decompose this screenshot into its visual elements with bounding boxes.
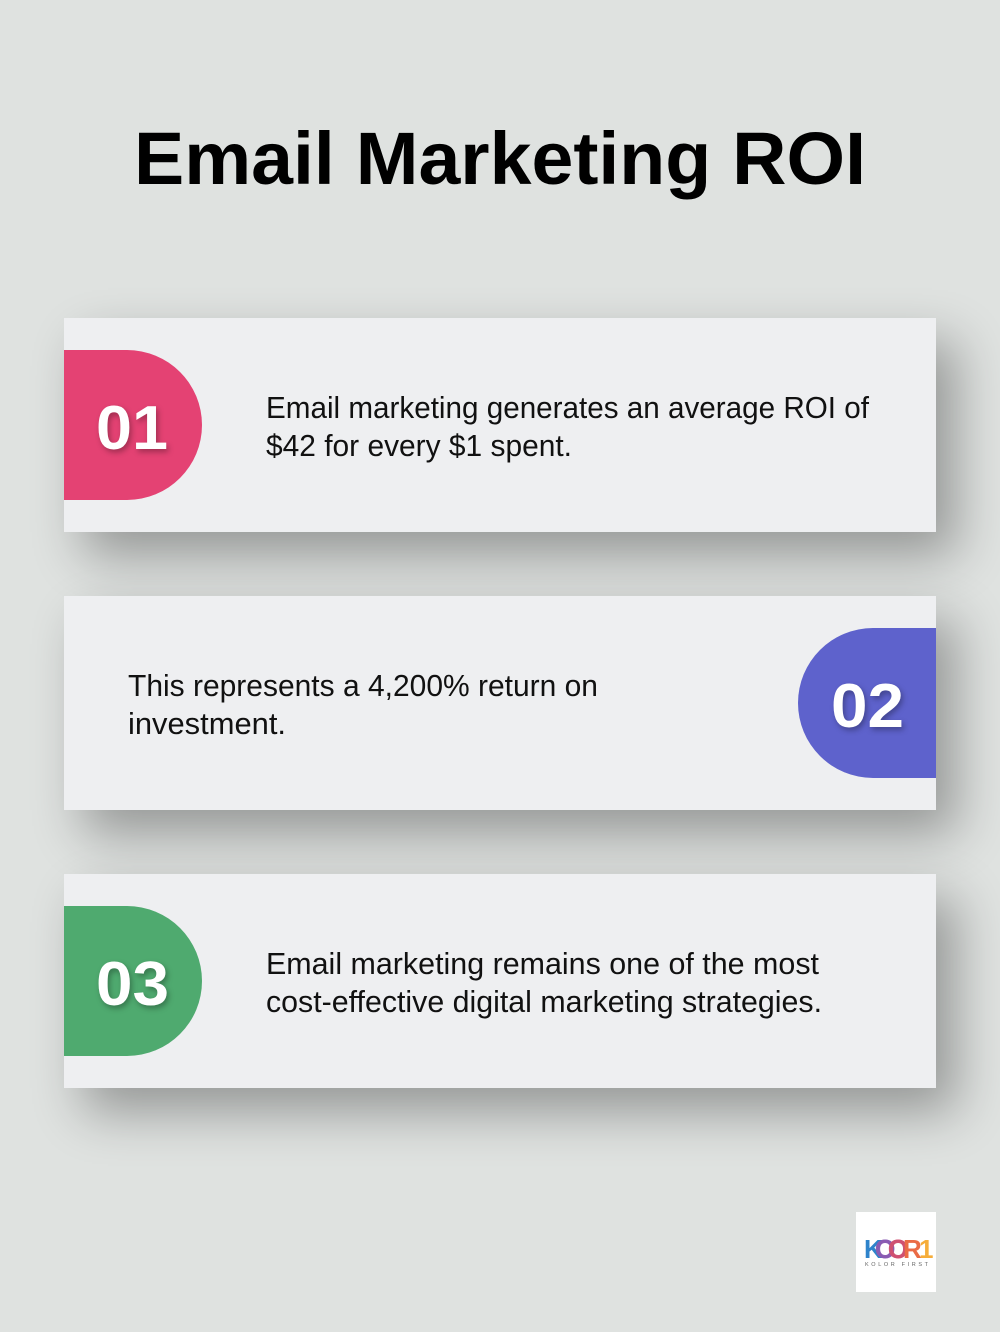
text: step 3 description: cost-effective digital marketing strategies. <box>266 985 822 1019</box>
badge: 01: 01 <box>96 394 168 463</box>
logo: Koor1 Kolor First: KOLOR FIRST <box>865 1262 929 1268</box>
text: step 1 description: Email marketing generates an average ROI of <box>266 391 870 425</box>
badge: 03: 03 <box>96 950 169 1019</box>
title: Email Marketing ROI <box>134 117 866 200</box>
text: step 3 description <box>266 947 822 1019</box>
text: step 2 description: This represents a 4,200% return on <box>128 669 598 703</box>
badge: 03 <box>64 906 202 1056</box>
text: step 1 description <box>266 391 870 463</box>
panel: step 2 <box>64 596 936 810</box>
badge: 02 <box>798 628 936 778</box>
logo: Koor1 Kolor First <box>856 1212 936 1292</box>
logo: Koor1 Kolor First: R <box>903 1234 922 1264</box>
logo: Koor1 Kolor First: K <box>864 1234 883 1264</box>
badge: 01 <box>64 350 202 500</box>
text: step 2 description <box>128 669 598 741</box>
text: step 3 description: Email marketing remains one of the most <box>266 947 820 981</box>
logo: Koor1 Kolor First: 1 <box>919 1234 933 1264</box>
panel: step 3 <box>64 874 936 1088</box>
text: step 2 description: investment. <box>128 707 286 741</box>
logo: Koor1 Kolor First: O <box>888 1234 908 1264</box>
panel: step 1 <box>64 318 936 532</box>
logo: Koor1 Kolor First: O <box>875 1234 895 1264</box>
badge: 02: 02 <box>831 672 904 741</box>
text: step 1 description: $42 for every $1 spent. <box>266 429 572 463</box>
